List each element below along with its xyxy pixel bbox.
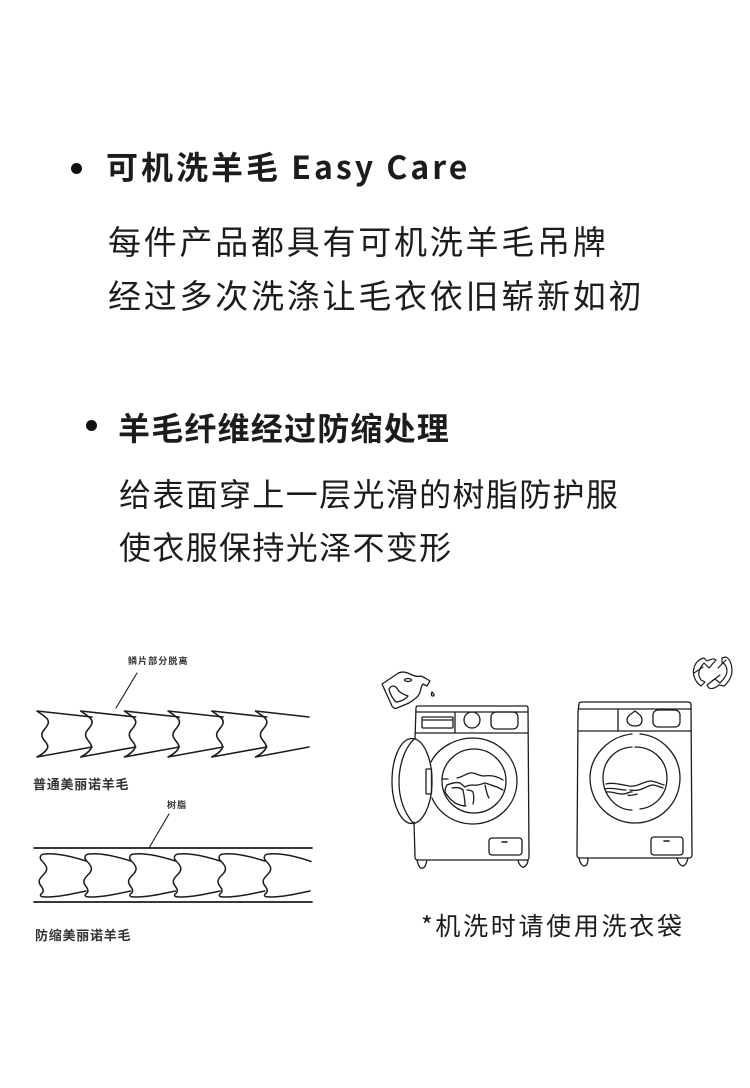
dispenser drawer	[422, 717, 453, 728]
door ring	[431, 738, 517, 824]
diagram: regular merino fibre	[37, 673, 309, 757]
icon: detergent bottle	[382, 672, 434, 708]
knob	[627, 711, 642, 726]
hinge	[426, 769, 432, 794]
label: regular merino: 普通美丽诺羊毛	[33, 774, 129, 793]
caption: use laundry bag: *机洗时请使用洗衣袋	[421, 907, 685, 943]
diagram: shrink-proof merino fibre	[34, 814, 312, 902]
heading: easy care: 可机洗羊毛 Easy Care	[106, 143, 470, 189]
label: resin: 树脂	[167, 798, 187, 811]
panel	[653, 710, 680, 727]
clothes	[442, 773, 503, 780]
panel	[491, 712, 518, 729]
knob	[464, 712, 480, 728]
drum	[442, 749, 506, 813]
text: shrink treatment line 2: 使衣服保持光泽不变形	[119, 523, 453, 569]
water	[606, 781, 664, 786]
bullet: easy care	[71, 163, 82, 174]
icon: closed washing machine	[577, 702, 692, 866]
door ring	[590, 734, 680, 823]
lower hatch	[651, 837, 683, 855]
icon: recycle arrows	[693, 657, 732, 689]
arrow: scales leader	[116, 673, 137, 708]
label: shrink-proof merino: 防缩美丽诺羊毛	[35, 925, 131, 944]
open door	[392, 738, 432, 824]
drum	[603, 747, 667, 810]
label: scales separated: 鳞片部分脱离	[128, 654, 189, 667]
text: shrink treatment line 1: 给表面穿上一层光滑的树脂防护服	[119, 470, 619, 516]
feet	[579, 858, 588, 866]
feet	[417, 860, 427, 868]
heading: shrink treatment: 羊毛纤维经过防缩处理	[118, 404, 450, 450]
arrow: resin leader	[149, 814, 169, 848]
text: easy care line 2: 经过多次洗涤让毛衣依旧崭新如初	[108, 270, 644, 318]
lower hatch	[489, 838, 522, 855]
text: easy care line 1: 每件产品都具有可机洗羊毛吊牌	[108, 216, 608, 264]
bullet: shrink treatment	[86, 420, 97, 431]
icon: open washing machine	[392, 706, 529, 868]
